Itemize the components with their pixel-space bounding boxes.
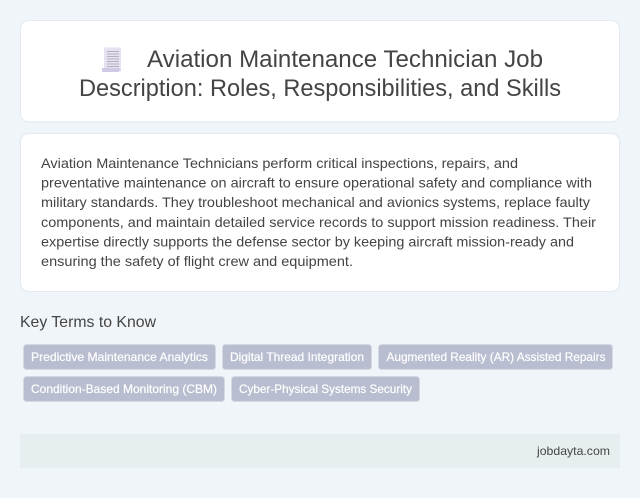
- tag: predictive maintenance analytics: [24, 344, 216, 370]
- tag: predictive maintenance analytics: Predictive Maintenance Analytics: [31, 350, 208, 364]
- icon: document scroll: [102, 48, 121, 72]
- title: Description: Roles, Responsibilities, and Skills: [79, 75, 561, 102]
- title: Aviation Maintenance Technician Job: [147, 46, 543, 73]
- tags: key terms: [24, 344, 612, 402]
- tag: digital thread integration: [222, 344, 372, 370]
- tag: condition-based monitoring: Condition-Based Monitoring (CBM): [31, 382, 217, 396]
- footer bar: [20, 434, 620, 468]
- description text: ensuring the safety of flight crew and equipment.: [41, 253, 353, 269]
- tag: digital thread integration: Digital Thread Integration: [230, 350, 364, 364]
- title: [79, 46, 561, 102]
- description text: preventative maintenance on aircraft to ensure operational safety and compliance with: [41, 174, 592, 190]
- tag: augmented reality assisted repairs: Augmented Reality (AR) Assisted Repairs: [386, 350, 606, 364]
- description text: Aviation Maintenance Technicians perform critical inspections, repairs, and: [41, 155, 518, 171]
- tag: condition-based monitoring: [24, 376, 224, 402]
- description text: military standards. They troubleshoot mechanical and avionics systems, replace faulty: [41, 194, 590, 210]
- footer source text: jobdayta.com: [536, 444, 610, 458]
- panel: title card: [20, 20, 620, 122]
- tag: cyber-physical systems security: Cyber-Physical Systems Security: [239, 382, 412, 396]
- tag: cyber-physical systems security: [232, 376, 420, 402]
- description text: [41, 155, 596, 269]
- description text: expertise directly supports the defense sector by keeping aircraft mission-ready and: [41, 234, 574, 250]
- description text: components, and maintain detailed service records to support mission readiness. Their: [41, 214, 596, 230]
- panel: description card: [20, 134, 620, 292]
- heading: key terms: Key Terms to Know: [20, 314, 156, 331]
- tag: augmented reality assisted repairs: [378, 344, 612, 370]
